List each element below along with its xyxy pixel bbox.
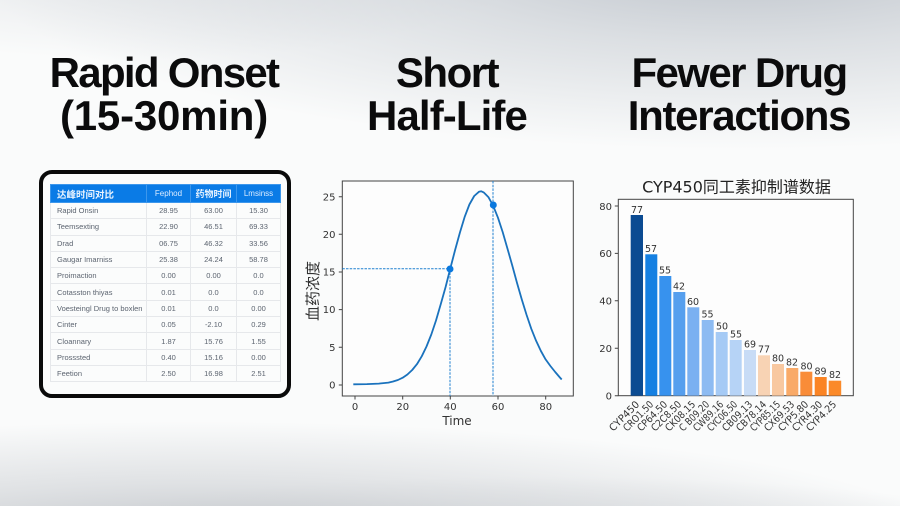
x axis category labels: CYP5.80 (776, 399, 811, 434)
dashed guide lines (342, 181, 493, 396)
x axis category labels: CK08.15 (663, 399, 698, 434)
comparison table: 0.40 (161, 353, 176, 362)
bar value labels: 82 (786, 358, 798, 368)
comparison table: 1.55 (251, 337, 266, 346)
x axis category labels: CYP450 (607, 399, 642, 434)
bar value labels: 57 (645, 244, 657, 255)
comparison table: 0.01 (161, 288, 176, 297)
comparison table: 25.38 (159, 255, 178, 264)
comparison table: 0.0 (208, 288, 219, 297)
x axis category labels: CB09.13 (720, 399, 755, 434)
comparison table: 1.87 (161, 337, 176, 346)
comparison table (50, 184, 281, 382)
comparison table: 28.95 (159, 206, 178, 215)
y axis: 20 (599, 344, 612, 355)
x axis category labels (607, 399, 839, 434)
axis title: time: Time (441, 414, 472, 428)
heading: rapid onset (50, 49, 280, 139)
heading: short half-life: Half-Life (367, 92, 527, 139)
heading: fewer drug interactions: Fewer Drug (631, 49, 847, 96)
marker: decline point (490, 202, 497, 208)
comparison table: Prosssted (57, 353, 90, 362)
comparison table: 0.00 (251, 353, 266, 362)
heading: fewer drug interactions (628, 49, 850, 139)
y axis: 40 (599, 296, 612, 308)
x axis category labels: CX69.53 (762, 399, 797, 434)
plot frame (342, 181, 573, 396)
comparison table: Proimaction (57, 271, 97, 280)
y axis: 60 (599, 249, 612, 260)
x axis category labels: CRO1.50 (621, 399, 656, 434)
comparison table: 2.50 (161, 369, 176, 378)
axis ticks and labels: 80 (539, 402, 552, 413)
concentration curve (353, 191, 562, 384)
bars (631, 215, 841, 396)
axis ticks and labels: 5 (329, 343, 336, 354)
comparison table: 达峰时间对比 (57, 190, 114, 200)
bar value labels: 55 (730, 330, 742, 340)
axis ticks and labels: 0 (352, 402, 358, 413)
x axis category labels: C2C8.50 (649, 399, 684, 434)
x axis category labels: CYP4.25 (804, 399, 839, 434)
comparison table: 15.76 (204, 337, 223, 346)
bar value labels: 77 (758, 344, 770, 356)
bar value labels: 82 (829, 370, 841, 381)
comparison table: 15.16 (204, 353, 223, 362)
comparison table: Rapid Onsin (57, 206, 98, 215)
x axis category labels: CB78.14 (734, 399, 769, 434)
bar value labels: 60 (687, 297, 699, 308)
comparison table: Lmsinss (244, 189, 273, 198)
plot frame (618, 199, 853, 396)
comparison table: 15.30 (249, 206, 268, 215)
x axis category labels: CYC06.50 (705, 399, 740, 434)
bar value labels: 69 (744, 340, 756, 350)
comparison table: Cloannary (57, 337, 91, 346)
heading: short half-life (367, 49, 527, 139)
comparison table: 69.33 (249, 222, 268, 231)
bar value labels: 55 (701, 310, 714, 320)
x axis category labels: C B09.20 (677, 399, 712, 434)
axis ticks and labels: 60 (492, 402, 504, 413)
x axis category labels: CYP85.15 (748, 399, 783, 434)
comparison table: 2.51 (251, 369, 266, 378)
comparison table: Voesteingl Drug to boxlen (57, 304, 142, 313)
heading: fewer drug interactions: Interactions (628, 92, 850, 139)
comparison table: 33.56 (249, 239, 268, 248)
bar value labels: 89 (814, 366, 827, 378)
bar value labels: 80 (772, 354, 784, 364)
comparison table: 0.0 (253, 288, 264, 297)
comparison table: 0.29 (251, 320, 266, 329)
heading: short half-life: Short (396, 49, 498, 96)
comparison table: 63.00 (204, 206, 223, 215)
comparison table: Fephod (155, 189, 182, 198)
comparison table: Feetion (57, 369, 82, 378)
comparison table: 0.01 (161, 304, 176, 313)
comparison table: 0.00 (206, 271, 221, 280)
axis title: concentration: 血药浓度 (304, 261, 322, 321)
bar value labels: 50 (716, 322, 728, 332)
comparison table: 22.90 (159, 222, 178, 231)
panel: comparison table card (39, 170, 291, 398)
comparison table: Teemsexting (57, 222, 99, 231)
bar value labels: 55 (659, 266, 671, 276)
comparison table: 58.78 (249, 255, 268, 264)
comparison table: 06.75 (159, 239, 178, 248)
axis ticks and labels: 20 (323, 230, 336, 241)
axis ticks and labels: 15 (323, 268, 336, 278)
bar value labels: 80 (800, 362, 813, 372)
comparison table: Gaugar Imarniss (57, 255, 112, 264)
comparison table: Cotasston thiyas (57, 288, 112, 297)
bar value labels (631, 205, 841, 381)
x axis category labels: CP64.50 (635, 399, 670, 434)
heading: rapid onset: Rapid Onset (50, 49, 278, 96)
comparison table: 药物时间 (195, 189, 232, 199)
x axis category labels: CYR4.30 (790, 399, 825, 434)
x axis category labels: CW89.16 (691, 399, 726, 434)
chart title: CYP450同工素抑制谱数据 (642, 178, 831, 196)
marker: onset point (446, 266, 454, 272)
axis ticks and labels: 20 (396, 402, 409, 413)
comparison table: 0.0 (253, 271, 264, 280)
heading: rapid onset: (15-30min) (60, 92, 268, 139)
bar value labels: 42 (673, 282, 685, 292)
comparison table: 0.05 (161, 320, 176, 329)
y axis: 0 (606, 392, 612, 402)
comparison table: 0.00 (161, 271, 176, 280)
y axis (599, 202, 618, 402)
comparison table: -2.10 (205, 320, 222, 329)
comparison table: Cinter (57, 320, 77, 329)
y axis: 80 (599, 202, 612, 213)
axis ticks and labels (323, 192, 552, 413)
comparison table: 16.98 (204, 369, 223, 378)
comparison table: 46.32 (204, 239, 223, 248)
comparison table: 24.24 (204, 255, 223, 264)
comparison table: 46.51 (204, 222, 223, 231)
axis ticks and labels: 25 (323, 192, 336, 204)
axis ticks and labels: 40 (444, 402, 457, 413)
bar value labels: 77 (631, 205, 643, 216)
comparison table: 0.0 (208, 304, 219, 313)
axis ticks and labels: 10 (323, 305, 336, 316)
axis ticks and labels: 0 (329, 380, 336, 392)
comparison table: Drad (57, 239, 73, 248)
comparison table: 0.00 (251, 304, 266, 313)
